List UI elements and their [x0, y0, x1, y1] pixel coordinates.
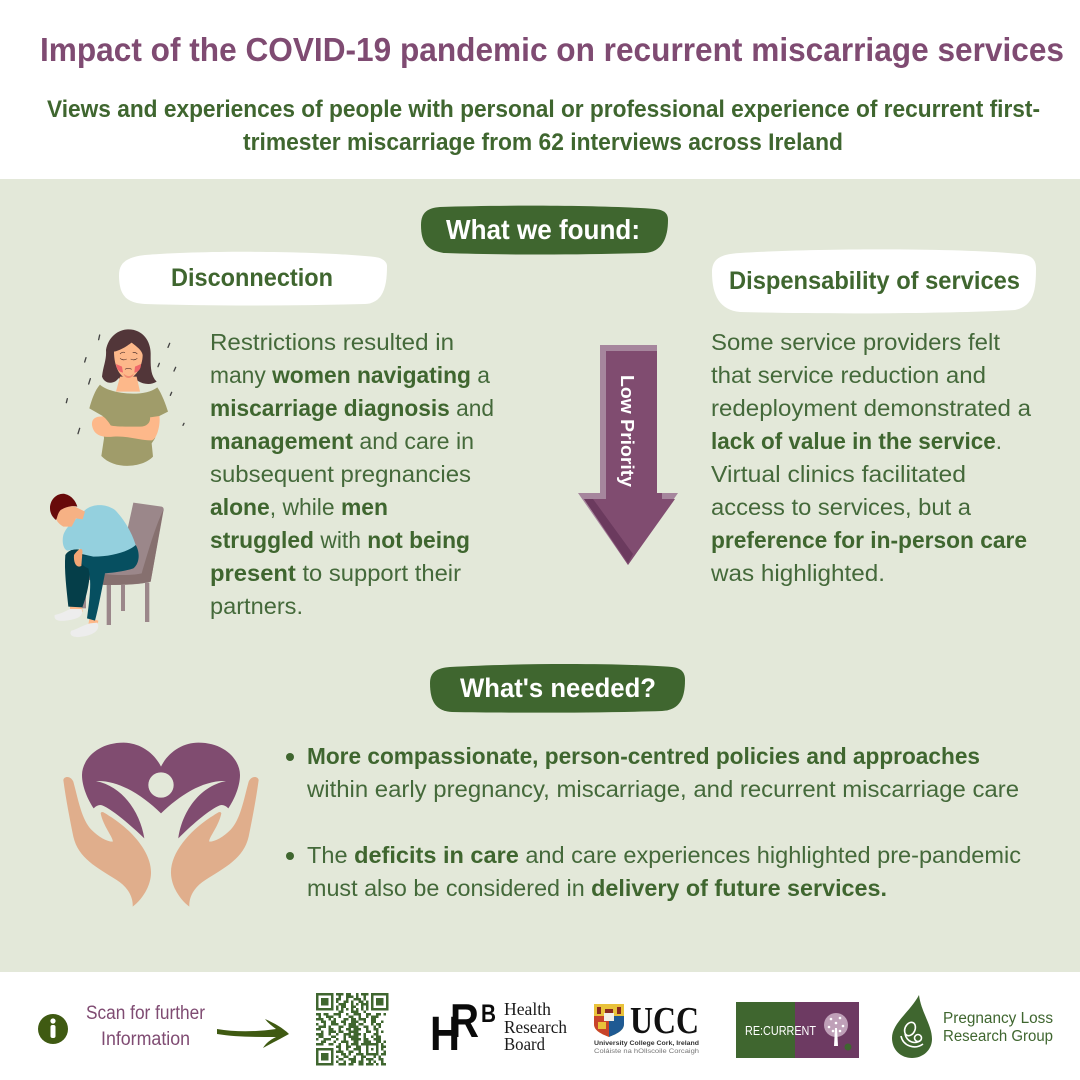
text block: disconnection: alone, while men [210, 494, 388, 520]
text block: what's needed bullets: within early pregnancy, miscarriage, and recurrent miscarriage care [306, 776, 1019, 802]
text block: dispensability: was highlighted. [710, 560, 885, 586]
text block: dispensability: redeployment demonstrated a [711, 395, 1032, 421]
icon: man on chair [50, 494, 164, 637]
logo: Pregnancy Loss Research Group [892, 995, 1053, 1058]
text block: disconnection: many women navigating a [210, 362, 491, 388]
text block: disconnection: management and care in [210, 428, 474, 454]
icon: woman with rain [50, 329, 184, 637]
text: scan for further information [86, 1003, 206, 1050]
heading: dispensability of services [712, 249, 1036, 313]
logo: University College Cork: Coláiste na hOllscoile Corcaigh [594, 1048, 699, 1055]
text block: dispensability: access to services, but a [711, 494, 972, 520]
logo: Pregnancy Loss Research Group: Pregnancy Loss [943, 1010, 1053, 1027]
logo: Pregnancy Loss Research Group: Research Group [943, 1028, 1053, 1045]
logo: Health Research Board: Health [504, 999, 551, 1019]
text block: what's needed bullets: More compassionate, person-centred policies and approaches [307, 743, 980, 769]
panel: findings background [0, 179, 1080, 972]
icon: information [38, 1014, 68, 1044]
subtitle: trimester miscarriage from 62 interviews across Ireland [243, 129, 843, 156]
text block: dispensability: that service reduction and [711, 362, 986, 388]
logo: Health Research Board: B [481, 1000, 496, 1028]
text block: disconnection [210, 329, 494, 619]
text block: disconnection: present to support their [210, 560, 461, 586]
heading: disconnection [119, 252, 387, 306]
logo: Health Research Board: H [430, 1008, 460, 1061]
text block: disconnection: struggled with not being [210, 527, 470, 553]
text block: what's needed bullets: The deficits in care and care experiences highlighted pre-pandemic [307, 842, 1021, 868]
text block: dispensability: Some service providers felt [711, 329, 1000, 355]
logo: RE:CURRENT: RE:CURRENT [745, 1023, 816, 1038]
arrow: low priority [578, 345, 678, 565]
QR code [316, 994, 387, 1064]
text block: disconnection: miscarriage diagnosis and [210, 395, 494, 421]
logo: Health Research Board: R [450, 994, 479, 1047]
logo: Health Research Board [430, 994, 567, 1061]
text: scan for further information: Scan for further [86, 1003, 206, 1024]
text block: disconnection: partners. [210, 593, 303, 619]
text block: disconnection: Restrictions resulted in [210, 329, 454, 355]
heading: disconnection: Disconnection [171, 264, 333, 292]
logo: University College Cork: UCC [630, 1000, 699, 1042]
text block: what's needed bullets [286, 743, 1021, 901]
heading: what we found [421, 206, 668, 254]
logo: University College Cork [594, 1000, 699, 1055]
heading: what's needed: What's needed? [460, 673, 656, 703]
icon: hands holding heart [63, 743, 259, 907]
heading: what we found: What we found: [446, 214, 640, 245]
heading: dispensability of services: Dispensability of services [729, 267, 1020, 295]
text block: disconnection: subsequent pregnancies [210, 461, 471, 487]
logo: Health Research Board: Board [504, 1034, 545, 1054]
text block: dispensability [710, 329, 1032, 586]
text: scan for further information: Information [101, 1029, 190, 1050]
logo: RE:CURRENT [736, 1002, 859, 1058]
subtitle: Views and experiences of people with personal or professional experience of recurrent first- [47, 96, 1040, 123]
logo: University College Cork: University College Cork, Ireland [594, 1040, 699, 1047]
text block: dispensability: lack of value in the service. [711, 428, 1002, 454]
title: Impact of the COVID-19 pandemic on recurrent miscarriage services [40, 31, 1064, 68]
arrow: low priority: Low Priority [617, 375, 637, 487]
text block: dispensability: preference for in-person care [711, 527, 1027, 553]
text block: what's needed bullets: must also be considered in delivery of future services. [307, 875, 887, 901]
arrow: to QR code [217, 1019, 289, 1048]
heading: what's needed [430, 664, 685, 713]
illustration: distressed woman and man [50, 329, 184, 637]
text block: dispensability: Virtual clinics facilitated [711, 461, 966, 487]
subtitle [47, 96, 1040, 156]
logo: Health Research Board: Research [504, 1017, 567, 1037]
